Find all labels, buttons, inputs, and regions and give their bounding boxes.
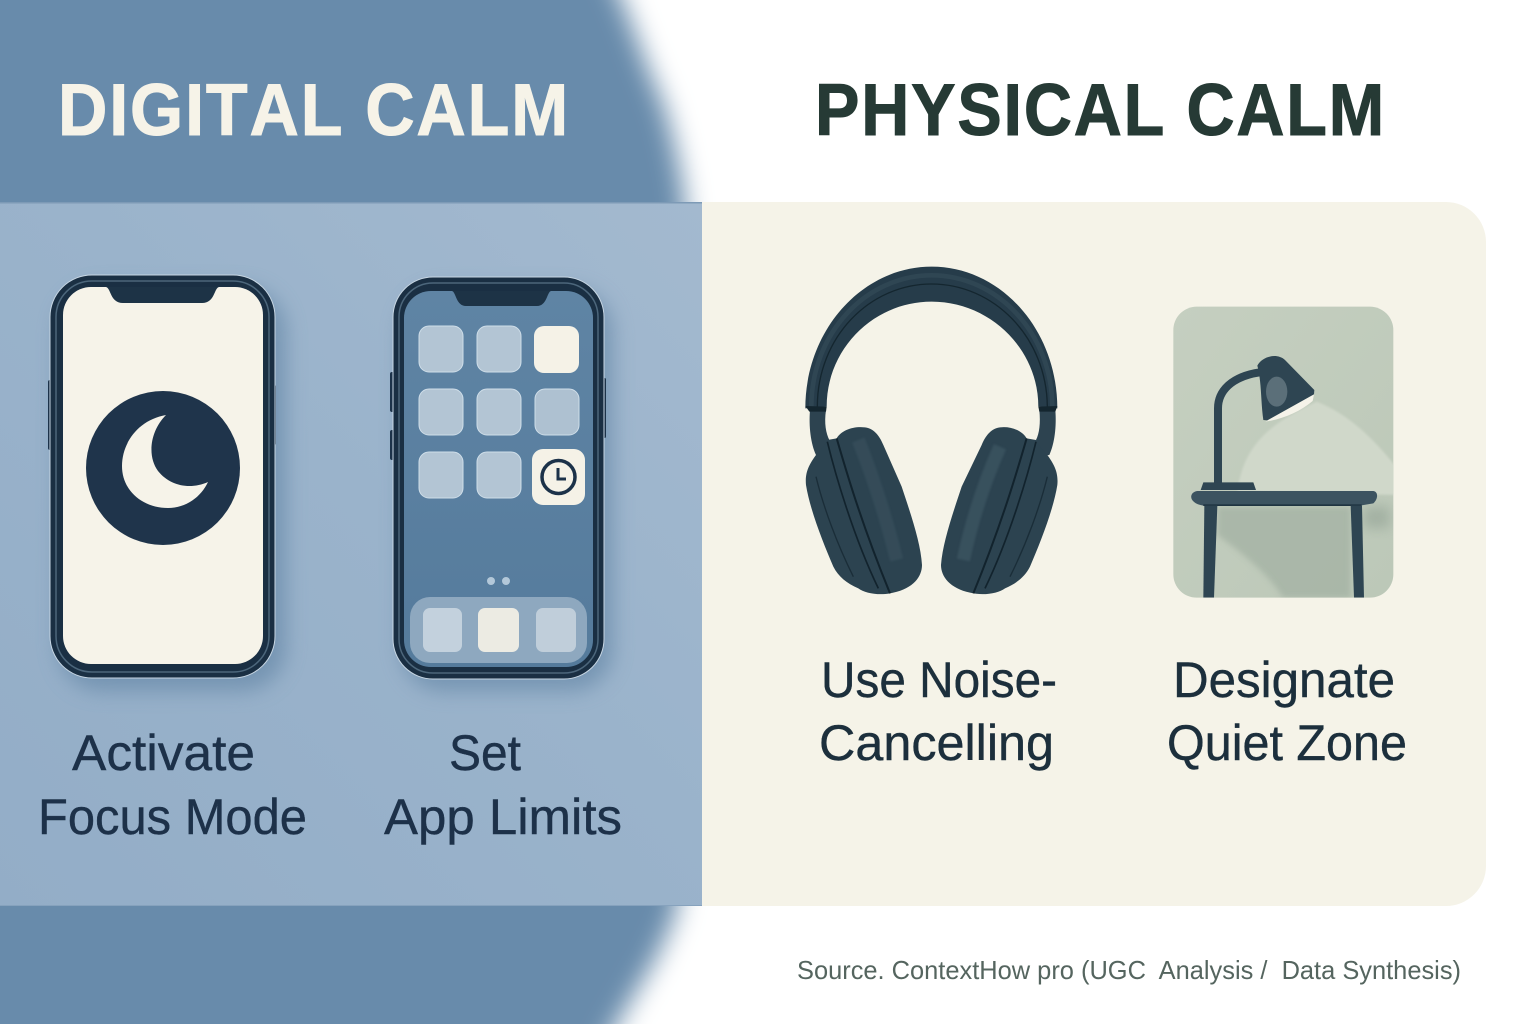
light beam bbox=[1237, 402, 1400, 495]
app dock bbox=[410, 597, 587, 663]
label: set app limits: Set bbox=[449, 725, 521, 781]
panel: physical calm bbox=[702, 202, 1486, 906]
icon: desk lamp card bbox=[1173, 307, 1400, 598]
heading: physical calm: PHYSICAL CALM bbox=[815, 70, 1386, 151]
table shadow bbox=[1217, 507, 1351, 598]
label: set app limits: App Limits bbox=[384, 789, 622, 845]
phone: app limits bbox=[390, 277, 613, 691]
icon: clock app bbox=[532, 449, 585, 505]
right ear cup bbox=[941, 427, 1058, 594]
label: use noise-cancelling: Use Noise- bbox=[821, 652, 1057, 708]
panel: digital calm bbox=[0, 202, 702, 906]
table bbox=[1191, 491, 1377, 506]
label: activate focus mode bbox=[38, 725, 307, 845]
icon: crescent moon bbox=[86, 391, 240, 545]
yokes bbox=[810, 410, 829, 457]
label: use noise-cancelling bbox=[819, 652, 1057, 771]
page indicator dots bbox=[487, 577, 510, 585]
lamp shade bbox=[1257, 356, 1314, 420]
left ear cup bbox=[806, 427, 922, 594]
label: use noise-cancelling: Cancelling bbox=[819, 715, 1054, 771]
label: set app limits bbox=[384, 725, 622, 845]
label: designate quiet zone bbox=[1167, 652, 1407, 771]
label: activate focus mode: Focus Mode bbox=[38, 789, 307, 845]
label: activate focus mode: Activate bbox=[72, 725, 255, 781]
lamp base bbox=[1201, 482, 1256, 490]
source note: Source. ContextHow pro (UGC Analysis / Data Synthesis) bbox=[797, 955, 1461, 985]
label: designate quiet zone: Designate bbox=[1173, 652, 1395, 708]
headband bbox=[805, 267, 1057, 408]
heading: digital calm: DIGITAL CALM bbox=[58, 70, 570, 151]
lamp arm bbox=[1218, 372, 1260, 483]
icon: headphones bbox=[805, 267, 1058, 594]
app icon grid bbox=[419, 326, 579, 498]
phone: focus mode bbox=[48, 275, 286, 691]
label: designate quiet zone: Quiet Zone bbox=[1167, 715, 1407, 771]
background: blue blurred blob bbox=[0, 0, 704, 1024]
